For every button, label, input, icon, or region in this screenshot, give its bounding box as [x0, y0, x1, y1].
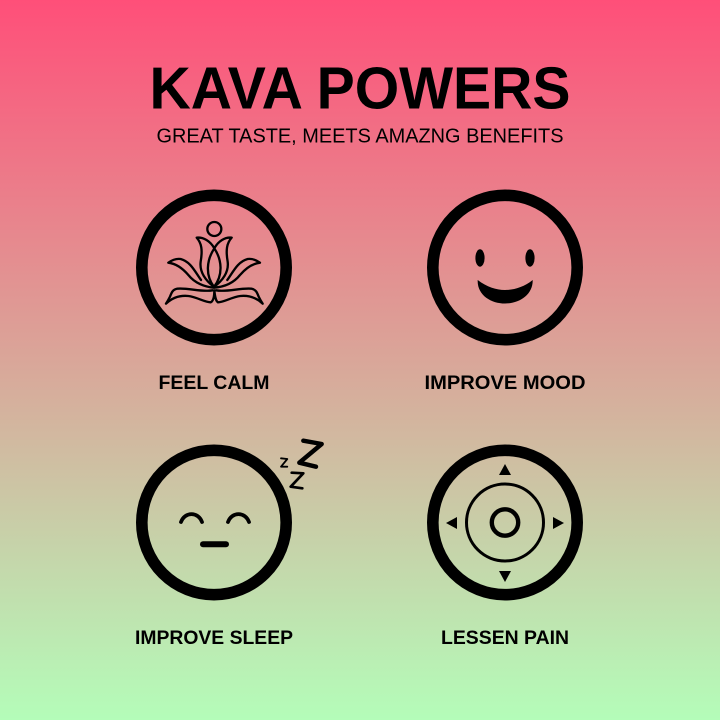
label: improve mood: IMPROVE MOOD — [424, 373, 586, 394]
label: improve sleep: IMPROVE SLEEP — [135, 628, 293, 649]
subtitle: GREAT TASTE, MEETS AMAZNG BENEFITS — [156, 126, 564, 148]
panel: feel calm — [142, 195, 286, 394]
label: lessen pain: LESSEN PAIN — [441, 628, 569, 649]
panel: lessen pain — [433, 450, 577, 649]
label: feel calm: FEEL CALM — [158, 373, 270, 394]
icon: target with arrows — [433, 450, 577, 595]
panel: improve mood — [424, 195, 586, 394]
panel: improve sleep — [135, 441, 322, 649]
title: KAVA POWERS — [150, 56, 570, 122]
icon: sleep letters — [281, 441, 322, 488]
icon: sleeping face — [142, 441, 322, 595]
icon: smiling face — [433, 195, 577, 340]
icon: lotus in circle — [142, 195, 286, 340]
